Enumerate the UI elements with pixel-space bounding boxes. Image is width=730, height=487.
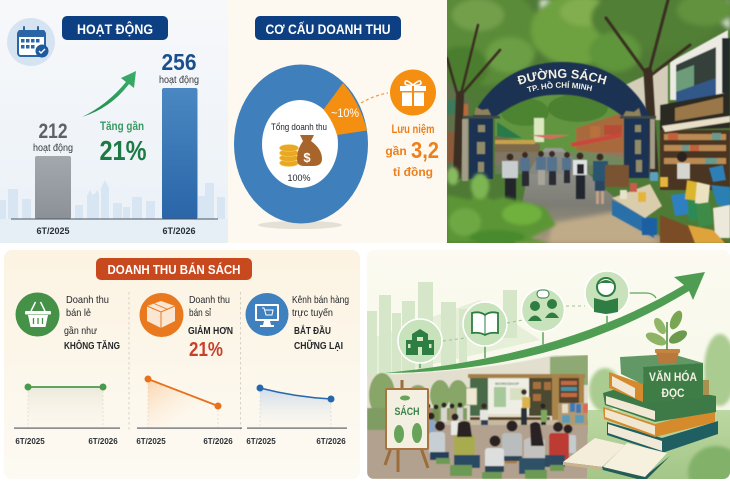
- text: Kênh bán hàng: [292, 294, 349, 306]
- foliage: [430, 0, 730, 90]
- panel: doanh thu bán sách: [4, 250, 360, 479]
- inset photo: workshop: [367, 355, 590, 479]
- axis labels: 6T/2025: [36, 226, 70, 236]
- heading: hoạt động: [62, 16, 168, 40]
- top green book: [620, 354, 703, 385]
- icon: library: [398, 319, 442, 368]
- people: [495, 151, 623, 204]
- text: 21%: [189, 339, 223, 361]
- dividers: [129, 292, 240, 430]
- far crowd: [426, 402, 462, 410]
- dashed connector: [361, 93, 388, 103]
- arch lettering: ĐƯỜNG SÁCH: [517, 68, 607, 85]
- icon: monitor cart: [246, 293, 288, 336]
- icon: coins: [280, 144, 298, 166]
- value: 256: [159, 49, 199, 86]
- icon: basket: [16, 292, 60, 336]
- text: [64, 294, 120, 352]
- line chart: 6T/2025: [246, 437, 276, 446]
- open book: [563, 438, 670, 481]
- donut center: [271, 122, 327, 183]
- icon: reading child: [585, 271, 656, 325]
- icon: box: [140, 293, 184, 337]
- stack of books: VĂN HÓA: [649, 369, 697, 384]
- text: tăng gần 21%: 21%: [100, 135, 147, 166]
- stack of books: [603, 354, 718, 453]
- line chart: 6T/2026: [88, 437, 118, 446]
- shadow: [258, 221, 342, 229]
- icon: discussion: [522, 288, 564, 346]
- line chart: 6T/2026: [203, 437, 233, 446]
- value: 256: hoạt động: [159, 75, 199, 86]
- line chart: 6T/2026: [316, 437, 346, 446]
- icon: calendar: [7, 18, 55, 66]
- photo: book street gate: [447, 0, 730, 243]
- text: GIẢM HƠN: [188, 324, 233, 337]
- line chart: [246, 384, 347, 446]
- donut chart: ~10%: [331, 108, 359, 120]
- text: bán lẻ: [66, 307, 91, 319]
- connector dashes: [443, 306, 585, 341]
- text: BẮT ĐẦU: [294, 324, 331, 337]
- line chart: 6T/2025: [15, 437, 45, 446]
- trunks: [447, 0, 690, 176]
- line chart: 6T/2025: [136, 437, 166, 446]
- value: 256: 256: [162, 49, 196, 75]
- value: 212: 212: [38, 120, 68, 143]
- donut chart: [234, 64, 368, 224]
- green book: [603, 382, 716, 422]
- value: 212: hoạt động: [33, 143, 73, 154]
- axis labels: [36, 226, 196, 236]
- arch lettering: TP. HỒ CHÍ MINH: [526, 80, 592, 92]
- foreground leaves: [447, 167, 556, 244]
- step icons: [398, 271, 656, 368]
- text: lưu niệm: gần: [385, 144, 407, 158]
- heading: [96, 258, 252, 280]
- line chart: [136, 376, 242, 446]
- green skyline: [367, 282, 517, 376]
- donut center: Tổng doanh thu: [271, 122, 327, 132]
- street interior: [495, 94, 625, 165]
- text: Doanh thu: [66, 294, 109, 306]
- buildings: [447, 30, 730, 190]
- text: [292, 294, 349, 352]
- text: lưu niệm: 3,2: [411, 137, 439, 163]
- line chart: [14, 384, 120, 446]
- panel: hoạt động: [0, 0, 228, 243]
- text: bán sỉ: [189, 307, 212, 319]
- audience: [427, 412, 576, 479]
- right landscape: [588, 410, 730, 479]
- heading: DOANH THU BÁN SÁCH: [108, 262, 240, 277]
- heading: CƠ CẤU DOANH THU: [266, 21, 390, 37]
- text: KHÔNG TĂNG: [64, 339, 120, 352]
- workshop title: WORKSHOP: [495, 381, 519, 386]
- value: 212: [33, 120, 73, 154]
- small orange book: [609, 372, 643, 402]
- heading: hoạt động: HOẠT ĐỘNG: [77, 20, 153, 37]
- donut center: 100%: [287, 173, 311, 183]
- easel: sách: SÁCH: [394, 405, 420, 418]
- text: trực tuyến: [292, 307, 333, 319]
- stack of books: ĐỌC: [662, 386, 685, 400]
- text: gần như: [64, 325, 97, 337]
- bar: 6T/2025: [35, 156, 71, 219]
- growth arrow: [385, 272, 705, 373]
- text: tăng gần 21%: Tăng gần: [100, 119, 144, 133]
- text: lưu niệm: [385, 122, 439, 179]
- arrow: growth: [82, 71, 136, 117]
- orange book: [603, 407, 715, 437]
- axis labels: 6T/2026: [162, 226, 196, 236]
- pavement: [515, 148, 668, 243]
- sub-panel: trực tuyến: [246, 293, 349, 446]
- text: lưu niệm: tỉ đồng: [393, 165, 433, 179]
- sub-panel: bán sỉ: [136, 293, 242, 446]
- easel: sách: [385, 380, 428, 472]
- book stall: [605, 152, 730, 243]
- icon: money bag: $: [303, 150, 311, 165]
- ground: [367, 425, 588, 479]
- teal book: [607, 421, 718, 453]
- text: tăng gần 21%: [100, 119, 147, 166]
- city skyline: [0, 180, 225, 219]
- sub-panel: bán lẻ: [14, 292, 120, 446]
- icon: gift: [390, 70, 436, 116]
- panel: cơ cấu doanh thu: [228, 0, 447, 243]
- bar: 6T/2026: [162, 88, 198, 219]
- heading: [255, 16, 401, 40]
- text: lưu niệm: Lưu niệm: [392, 122, 434, 136]
- workshop booth: [468, 374, 585, 378]
- axis: [11, 218, 218, 220]
- bush: [687, 444, 730, 479]
- panel: văn hóa đọc: [367, 250, 730, 487]
- text: CHỮNG LẠI: [294, 339, 343, 352]
- text: [188, 294, 233, 361]
- plant in pot: [646, 310, 687, 364]
- arch gate: [462, 62, 656, 181]
- green haze behind steps: [367, 300, 540, 375]
- text: Doanh thu: [189, 294, 230, 306]
- icon: book: [463, 302, 507, 358]
